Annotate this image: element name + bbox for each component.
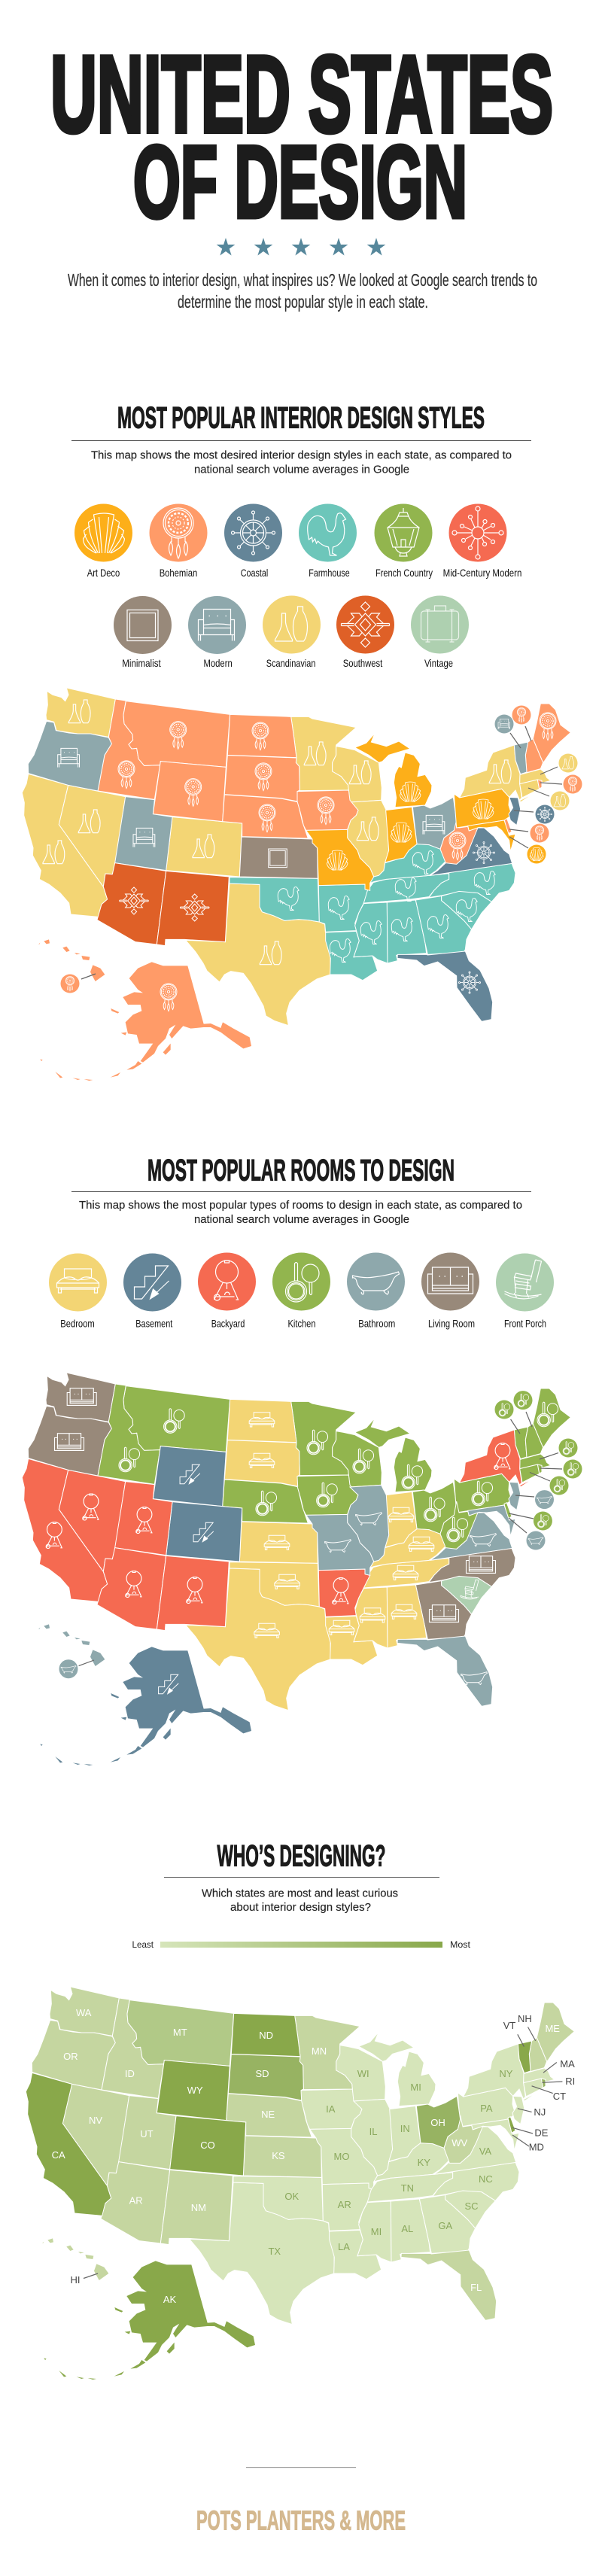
gradient legend: least to most: Most [450, 1939, 471, 1950]
legend item: coastal [224, 504, 282, 579]
states: backyard [22, 1430, 534, 1631]
legend item: bathroom: Bathroom [358, 1317, 395, 1329]
state labels: small states with leader lines [71, 2013, 575, 2286]
description: who's designing: Which states are most and least curious [202, 1887, 398, 1899]
legend item: front porch: Front Porch [504, 1317, 546, 1329]
state labels: small states with leader lines: CT [553, 2091, 566, 2102]
legend item: coastal: Coastal [241, 567, 268, 579]
state labels: white: ME [545, 2023, 560, 2034]
states: minimalist [239, 837, 318, 878]
state labels: olive: IA [326, 2103, 336, 2115]
map: rooms by state [22, 1373, 582, 1765]
states: basement [40, 1446, 251, 1765]
description: styles map: This map shows the most desired interior design styles in each state, as compared to [91, 449, 512, 462]
state labels: small states with leader lines: NJ [534, 2106, 546, 2118]
legend item: bedroom [49, 1254, 107, 1329]
state labels: olive: TX [268, 2246, 281, 2257]
state labels: white: FL [470, 2282, 482, 2293]
state labels: olive: MI [410, 2082, 421, 2093]
legend item: french country: French Country [375, 567, 433, 579]
state labels: small states with leader lines: RI [565, 2076, 575, 2087]
state labels: white: CA [52, 2149, 65, 2161]
state labels: white: MT [173, 2027, 187, 2038]
legend item: southwest [336, 596, 394, 669]
state labels: small states with leader lines: HI [71, 2274, 80, 2286]
legend item: modern: Modern [203, 657, 233, 669]
state labels: olive: IL [369, 2126, 377, 2137]
state labels: olive: NY [499, 2068, 513, 2079]
states: medium [127, 2000, 234, 2066]
state labels: white: KS [272, 2150, 285, 2161]
state labels: white: ND [259, 2030, 273, 2041]
states layer: rooms [22, 1373, 570, 1765]
state labels: olive: IN [400, 2123, 410, 2134]
state labels: small states with leader lines: MA [560, 2058, 575, 2070]
legend item: modern [188, 596, 246, 669]
state labels: small states with leader lines: VT [503, 2020, 515, 2031]
state labels: small states with leader lines: DE [534, 2127, 549, 2139]
states: bathroom [38, 1482, 521, 1706]
legend item: vintage: Vintage [424, 657, 453, 669]
legend item: mid-century modern [443, 504, 521, 579]
footer divider [246, 2467, 356, 2468]
states: living room [28, 1373, 515, 1639]
map icons: styles [43, 700, 556, 1011]
state labels: white: WA [76, 2007, 92, 2018]
state labels: olive: SC [464, 2200, 479, 2212]
description: rooms map [79, 1199, 522, 1226]
state labels: olive: VA [479, 2146, 491, 2157]
state labels: white: WY [187, 2085, 203, 2096]
legend item: living room: Living Room [428, 1317, 475, 1329]
states: strong [228, 2054, 546, 2148]
state labels: white: NV [89, 2115, 102, 2126]
state labels: white [52, 2007, 560, 2305]
footer brand: POTS PLANTERS & MORE [196, 2505, 406, 2536]
legend item: farmhouse [299, 504, 357, 579]
states layer: styles [22, 688, 570, 1081]
description: styles map [91, 449, 512, 476]
state labels: white: WV [451, 2137, 467, 2149]
states: kitchen [98, 1384, 570, 1549]
legend item: kitchen [272, 1252, 330, 1329]
state labels: white: CO [200, 2140, 215, 2151]
state labels: olive: MI [371, 2226, 382, 2237]
states: bohemian [38, 699, 570, 1081]
legend item: bathroom [347, 1252, 405, 1329]
intro text [68, 270, 537, 312]
description: who's designing: about interior design styles? [230, 1901, 371, 1914]
state labels: olive: MO [334, 2151, 349, 2162]
state labels: olive: WI [357, 2068, 369, 2079]
map icons: rooms [46, 1388, 558, 1694]
states: front porch [442, 1576, 491, 1614]
state labels: olive: GA [438, 2220, 453, 2231]
state labels: white: NE [261, 2109, 275, 2120]
state labels: white: UT [140, 2128, 154, 2140]
states: bedroom [186, 1399, 449, 1711]
legend item: bohemian: Bohemian [160, 567, 197, 579]
states: modern [28, 721, 528, 871]
state labels: olive: LA [338, 2241, 350, 2252]
states: strongest [26, 2013, 532, 2380]
state labels: small states with leader lines: MD [529, 2142, 544, 2152]
legend item: front porch [496, 1254, 554, 1329]
heading: who's designing: WHO’S DESIGNING? [217, 1839, 385, 1872]
state labels: olive: AR [338, 2199, 351, 2210]
legend item: southwest: Southwest [343, 657, 382, 669]
legend item: scandinavian [263, 596, 321, 669]
state labels: small states with leader lines: NH [518, 2013, 532, 2024]
legend item: backyard [198, 1252, 256, 1329]
states layer: curiosity [26, 1987, 574, 2380]
legend item: art deco: Art Deco [87, 567, 120, 579]
states: coastal [397, 797, 521, 1021]
state labels: olive [268, 2068, 513, 2257]
legend item: farmhouse: Farmhouse [309, 567, 350, 579]
legend item: kitchen: Kitchen [287, 1317, 316, 1329]
state labels: white: OR [63, 2051, 78, 2062]
map: interior design styles by state [22, 688, 582, 1081]
states: art deco [306, 733, 515, 890]
description: rooms map: national search volume averages in Google [194, 1213, 409, 1226]
states: lightest [190, 2032, 555, 2325]
state labels: olive: OK [284, 2191, 299, 2202]
legend: interior design styles [74, 504, 521, 669]
legend: rooms [49, 1252, 554, 1329]
intro text: determine the most popular style in each state. [178, 292, 428, 312]
legend item: backyard: Backyard [211, 1317, 245, 1329]
state labels: olive: AL [401, 2223, 413, 2234]
description: rooms map: This map shows the most popular types of rooms to design in each state, as compared to [79, 1199, 522, 1212]
legend item: mid-century modern: Mid-Century Modern [443, 567, 521, 579]
state labels: white: OH [430, 2117, 445, 2128]
five stars [217, 238, 385, 256]
legend item: art deco [74, 504, 132, 579]
states: farmhouse [230, 844, 515, 981]
states: southwest [97, 863, 229, 946]
description: who's designing [202, 1887, 398, 1914]
state labels: white: SD [255, 2068, 269, 2079]
title [50, 33, 553, 239]
state labels: white: ID [125, 2068, 135, 2079]
state labels: olive: TN [401, 2182, 414, 2194]
gradient legend: least to most [132, 1939, 471, 1950]
map: curiosity by state [26, 1987, 575, 2380]
state labels: olive: NC [479, 2173, 493, 2185]
legend item: living room [421, 1252, 479, 1329]
state labels: olive: KY [418, 2157, 430, 2168]
states: scandinavian [22, 688, 551, 1026]
legend item: minimalist: Minimalist [122, 657, 161, 669]
callouts: small states, styles [60, 706, 582, 993]
legend item: minimalist [114, 596, 172, 669]
legend item: vintage [411, 596, 469, 669]
legend item: bedroom: Bedroom [60, 1317, 95, 1329]
description: styles map: national search volume averages in Google [194, 464, 409, 476]
states: light [32, 1987, 574, 2320]
callouts: small states, rooms [59, 1391, 582, 1678]
legend item: basement: Basement [135, 1317, 172, 1329]
legend item: basement [123, 1254, 181, 1329]
state labels: olive: PA [480, 2103, 493, 2114]
gradient legend: least to most: Least [132, 1939, 154, 1950]
state labels: white: AR [129, 2194, 143, 2206]
legend item: scandinavian: Scandinavian [266, 657, 315, 669]
legend item: bohemian [149, 504, 208, 579]
state labels: white: NM [191, 2202, 206, 2213]
state labels: white: AK [163, 2294, 176, 2305]
legend item: french country [375, 504, 433, 579]
state labels: white: MN [312, 2045, 327, 2057]
